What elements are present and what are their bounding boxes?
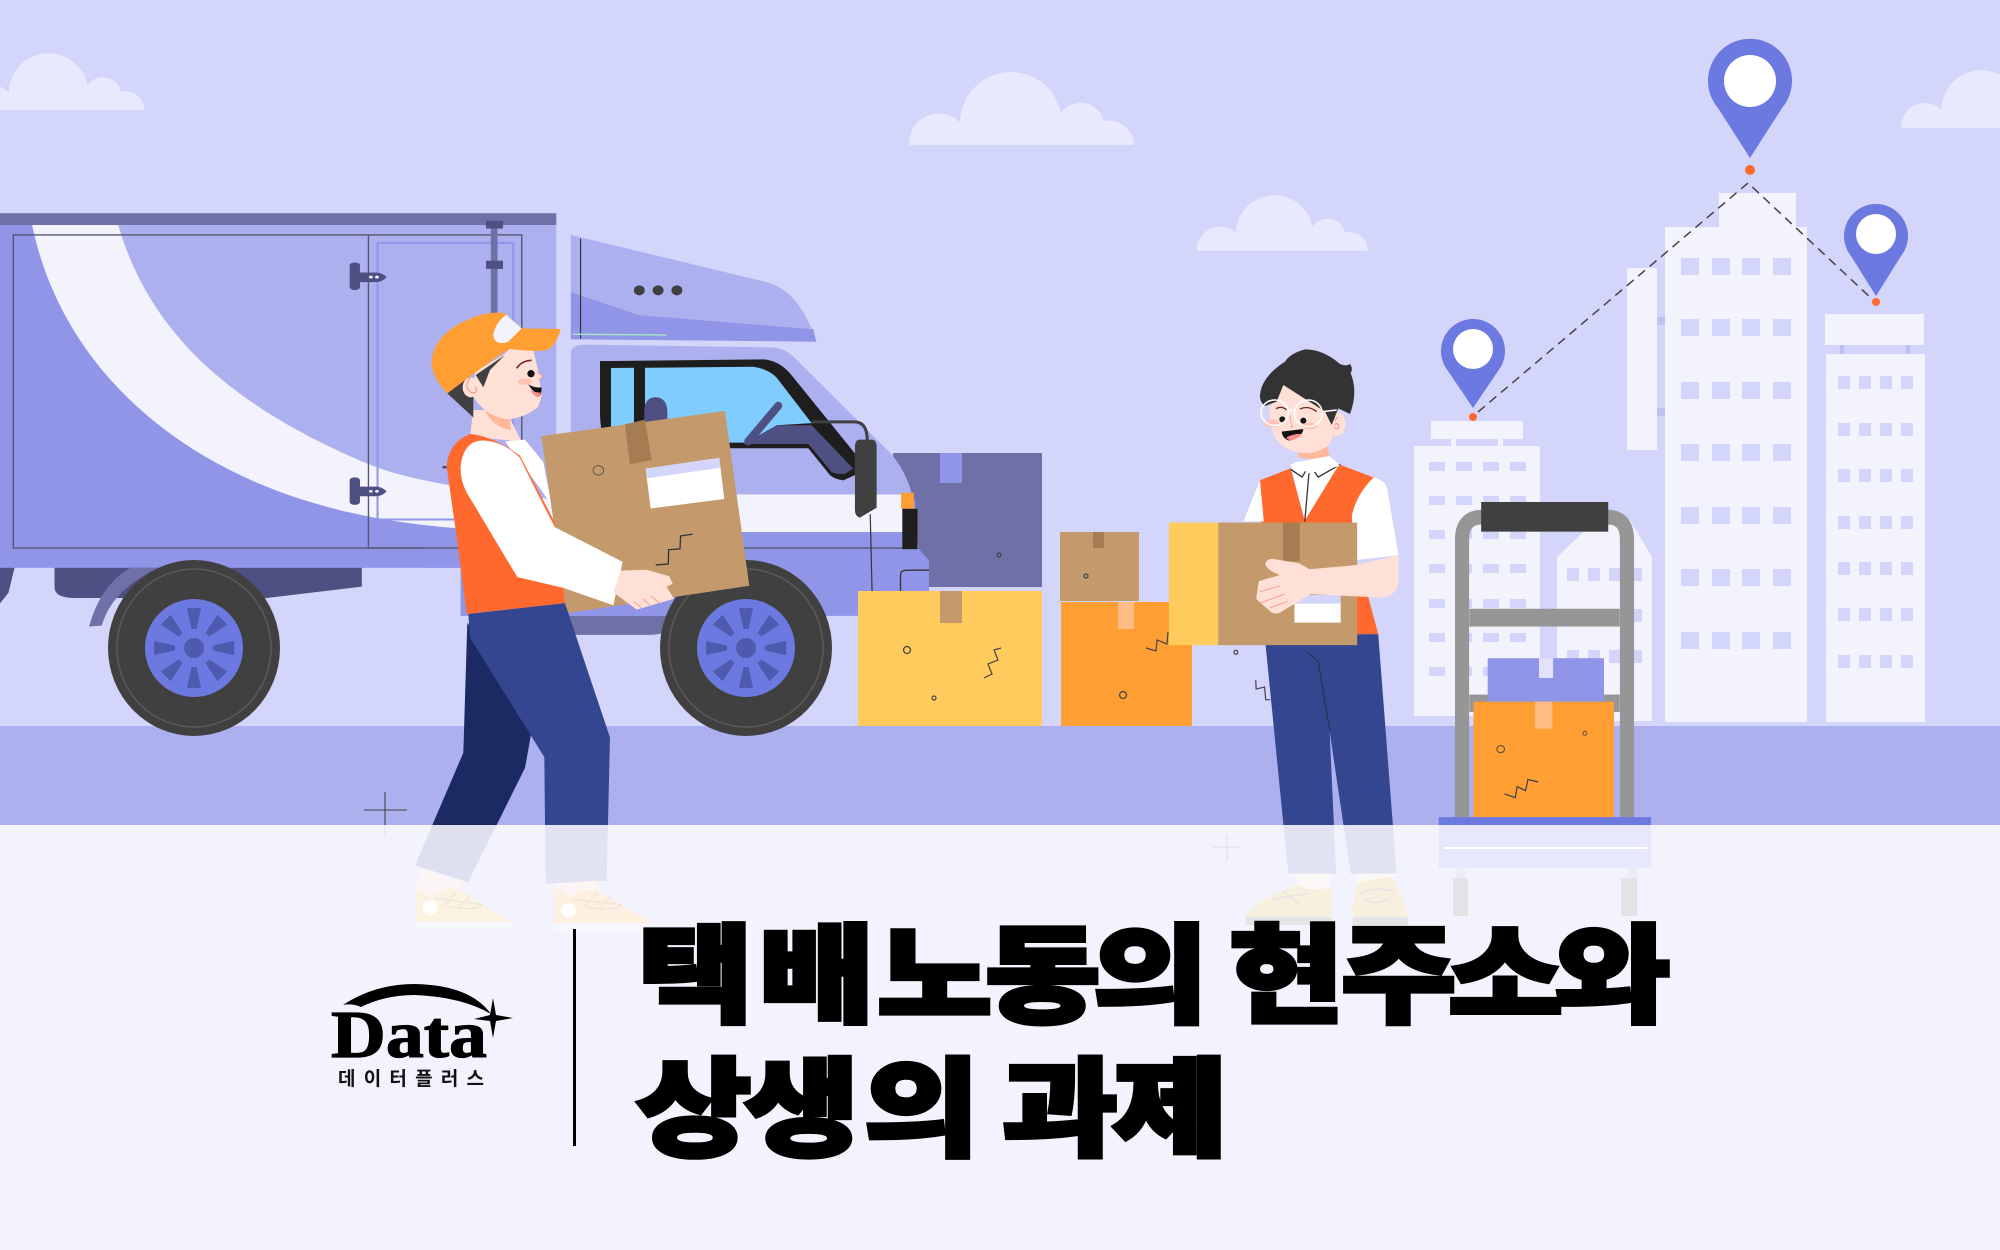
dashboard: [743, 425, 853, 474]
right worker sleeve left: [1244, 480, 1264, 521]
left worker trousers: [468, 603, 610, 884]
sky background: [0, 0, 2000, 825]
side mirror: [855, 440, 877, 518]
right worker hair: [1260, 349, 1354, 425]
crosshair mark left: [364, 792, 407, 838]
fairing green highlight: [573, 333, 667, 336]
building: tall centre tower: [1665, 193, 1807, 722]
box: small brown parcel: [1060, 532, 1139, 601]
left worker parcel: [541, 411, 749, 613]
right worker arms and parcel: [1169, 523, 1399, 700]
right worker face: [1269, 383, 1335, 453]
right worker mouth: [1282, 429, 1303, 441]
left worker undershirt: [505, 440, 552, 506]
delivery truck: [0, 213, 929, 736]
title line 1: 택배노동의 현주소와: [638, 917, 1670, 1036]
roof fairing: [571, 235, 816, 341]
window frame: [600, 359, 855, 480]
left worker vest: [447, 434, 565, 614]
right worker sleeve right: [1352, 477, 1399, 560]
driver seat: [644, 397, 667, 427]
left worker hand: [613, 570, 674, 610]
right worker body: [1244, 457, 1399, 874]
route: dashed line between location pins: [1478, 183, 1873, 412]
trolley base detail line: [1443, 847, 1647, 849]
trolley feet: [1453, 868, 1637, 916]
right worker collar top: [1293, 456, 1340, 473]
rear fender: [89, 568, 159, 627]
right worker eyes and brows: [1264, 407, 1317, 429]
building: small house behind trolley: [1557, 520, 1652, 721]
small box marks: [1234, 650, 1270, 700]
right worker glasses: [1261, 400, 1337, 427]
cab chassis: [564, 616, 673, 635]
front wheel: [660, 560, 832, 736]
logo: Data Plus: [331, 984, 513, 1090]
steering wheel: [748, 406, 778, 441]
cargo box white swoosh: [32, 225, 556, 530]
headlight: [901, 570, 929, 596]
logo arc: [343, 984, 491, 1014]
left worker front shoe: [554, 887, 653, 931]
hand trolley with boxes: [1439, 502, 1651, 868]
trolley frame: [1462, 517, 1627, 820]
left worker face: [473, 348, 543, 419]
cab lower body: [424, 493, 929, 616]
rear wheel: [108, 560, 280, 736]
city buildings: [1414, 193, 1925, 722]
crosshair mark right: [1213, 834, 1241, 861]
left worker sleeve: [461, 440, 623, 605]
mirror cable: [870, 514, 873, 616]
undercarriage: [55, 568, 362, 598]
truck cargo box and cab: [0, 213, 929, 635]
mirror arm: [812, 422, 867, 440]
logo korean name: 데이터플러스: [338, 1068, 484, 1090]
fairing vents: [634, 285, 682, 295]
left worker body: [415, 411, 749, 884]
icon: left location pin: [1441, 319, 1505, 421]
left worker neck: [470, 410, 522, 442]
marker light: [901, 493, 914, 509]
right worker arm and hand: [1256, 555, 1399, 613]
left worker neck shadow: [485, 410, 511, 430]
cargo box body: [0, 225, 556, 568]
icon: right location pin: [1844, 204, 1908, 306]
left worker mouth: [528, 384, 542, 397]
right worker faded shoes: [1245, 874, 1408, 925]
right worker ankles: [1297, 874, 1395, 889]
title: [636, 917, 1670, 1170]
trolley handle: [1481, 502, 1608, 532]
box: orange parcel: [1061, 602, 1192, 726]
window pillar: [634, 365, 645, 423]
building: left tower: [1414, 421, 1540, 716]
right worker left shoe: [1245, 885, 1332, 925]
right worker head: [1260, 349, 1354, 473]
right worker vest: [1260, 464, 1378, 634]
left worker ear: [463, 377, 479, 397]
trolley crossbars: [1469, 609, 1620, 712]
right worker trousers: [1265, 634, 1397, 874]
window glass: [611, 367, 812, 443]
roof fairing lower shade: [571, 292, 816, 342]
right worker trouser crease: [1307, 652, 1330, 730]
box: dark stacked parcel behind truck: [893, 453, 1042, 587]
left worker back hair: [447, 376, 473, 417]
roof fairing line: [580, 239, 582, 339]
left worker temple hair: [476, 355, 505, 387]
building: right tower: [1825, 314, 1925, 722]
cab upper body: [571, 345, 912, 495]
right worker ear: [1328, 412, 1346, 436]
door lock bar: [486, 221, 503, 318]
left worker eye and brow: [517, 360, 543, 385]
cab white band: [556, 495, 903, 532]
cab sill line: [368, 547, 903, 549]
cloud: top centre: [909, 72, 1134, 145]
right worker shirt: [1291, 457, 1339, 524]
truck windshield: [600, 359, 877, 518]
vertical divider: [573, 929, 576, 1146]
rear bumper: [0, 568, 15, 603]
ground road: [0, 726, 2000, 825]
cargo box roof stripe: [0, 213, 556, 225]
trolley orange box: [1474, 702, 1614, 818]
cloud: middle right: [1197, 195, 1368, 251]
right worker collar lines: [1291, 464, 1340, 522]
cloud: top right: [1901, 70, 2000, 128]
right worker parcel: [1169, 523, 1357, 645]
door latch tick: [442, 466, 451, 468]
title line 2: 상생의 과제: [636, 1051, 1228, 1170]
logo wordmark: Data: [331, 998, 487, 1072]
front grille: [902, 509, 917, 549]
left worker ankles: [415, 869, 603, 896]
building: side tower: [1627, 268, 1665, 450]
logo star: [474, 998, 513, 1038]
door hinge top: [350, 262, 387, 290]
left worker rear leg: [415, 623, 532, 882]
right worker holding box: [1169, 349, 1399, 874]
cloud: top left: [0, 53, 145, 110]
cargo box lower colour sweep: [0, 225, 606, 568]
box: yellow parcel: [858, 591, 1042, 726]
left worker cap: [432, 313, 561, 393]
left worker rear shoe: [415, 887, 512, 929]
left worker cap badge: [493, 315, 522, 343]
left worker faded shoes: [415, 869, 653, 931]
trolley purple box: [1488, 658, 1604, 702]
cargo door lines: [13, 235, 522, 548]
icon: large location pin: [1708, 39, 1792, 175]
right worker right shoe: [1353, 877, 1408, 925]
right worker neck: [1298, 443, 1329, 459]
left worker carrying box: [415, 313, 749, 884]
trolley base plate: [1439, 817, 1651, 868]
bottom panel overlay: [0, 825, 2000, 1250]
door hinge bottom: [350, 477, 387, 505]
left worker head: [432, 313, 561, 442]
